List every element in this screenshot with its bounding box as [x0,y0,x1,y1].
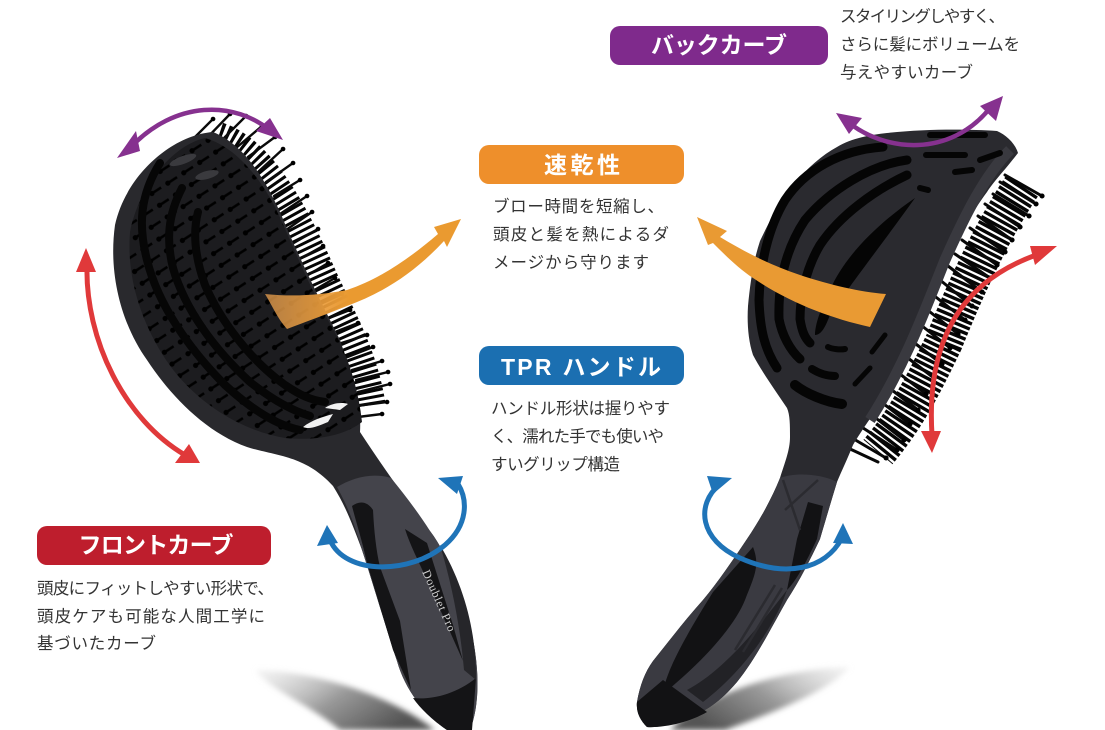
label: front curve [37,526,271,565]
left brush pin field [129,138,362,439]
arrow: left orange airflow [265,219,461,329]
right grip ridges [735,480,818,652]
text: back curve description: スタイリングしやすく、 [840,7,1005,26]
left grip side band [440,545,476,680]
arrow: right red double curve [921,246,1057,453]
right grip panels [637,502,823,727]
arrow: right purple double curve [836,96,1003,145]
text: front curve description: 頭皮ケアも可能な人間工学に [37,607,265,626]
text: TPR handle description: く、濡れた手でも使いや [491,427,664,446]
right grip side band [687,590,787,702]
shadow: right brush [670,667,850,730]
label: back curve [610,26,828,65]
left brush ridges [142,163,325,430]
label: back curve: バックカーブ [651,32,787,58]
right brush bristles [848,175,1042,462]
text: front curve description: 頭皮にフィットしやすい形状で、 [37,579,274,598]
left brush [113,114,477,730]
right brush head and handle [637,130,1018,727]
arrow: left red double curve [76,248,200,463]
label: quick drying: 速乾性 [544,152,620,178]
right grip [637,475,837,727]
right brush [637,130,1042,727]
text: back curve description: さらに髪にボリュームを [840,35,1020,54]
arrow: right orange airflow [697,217,886,327]
label: TPR handle: TPR ハンドル [501,354,661,380]
left brush holes [168,151,348,428]
text: quick drying description [493,196,669,272]
left brush head and handle [113,132,477,730]
arrow: left blue rotation [317,476,464,567]
text: quick drying description: ブロー時間を短縮し、 [493,196,664,216]
right brush slots [759,135,1000,404]
text: quick drying description: 頭皮と髪を熱によるダ [493,225,669,244]
brand name: Doublet Pro [419,568,459,634]
text: back curve description [840,7,1020,82]
text: TPR handle description [491,399,670,474]
text: back curve description: 与えやすいカーブ [840,62,973,82]
left grip panels [352,503,476,730]
left brush bristles [190,114,390,418]
shadow: left brush [255,670,435,730]
left grip [337,476,477,730]
text: TPR handle description: すいグリップ構造 [491,455,620,474]
text: front curve description: 基づいたカーブ [37,633,156,653]
arrow: right blue rotation [705,476,853,569]
arrow: left purple double curve [117,110,283,158]
right brush center slot [815,198,915,335]
right brush rim [870,150,1010,420]
label: TPR handle [479,346,684,385]
label: front curve: フロントカーブ [78,532,234,558]
text: quick drying description: メージから守ります [493,253,649,272]
text: front curve description [37,579,274,653]
text: TPR handle description: ハンドル形状は握りやす [491,399,670,418]
label: quick drying [479,145,684,184]
